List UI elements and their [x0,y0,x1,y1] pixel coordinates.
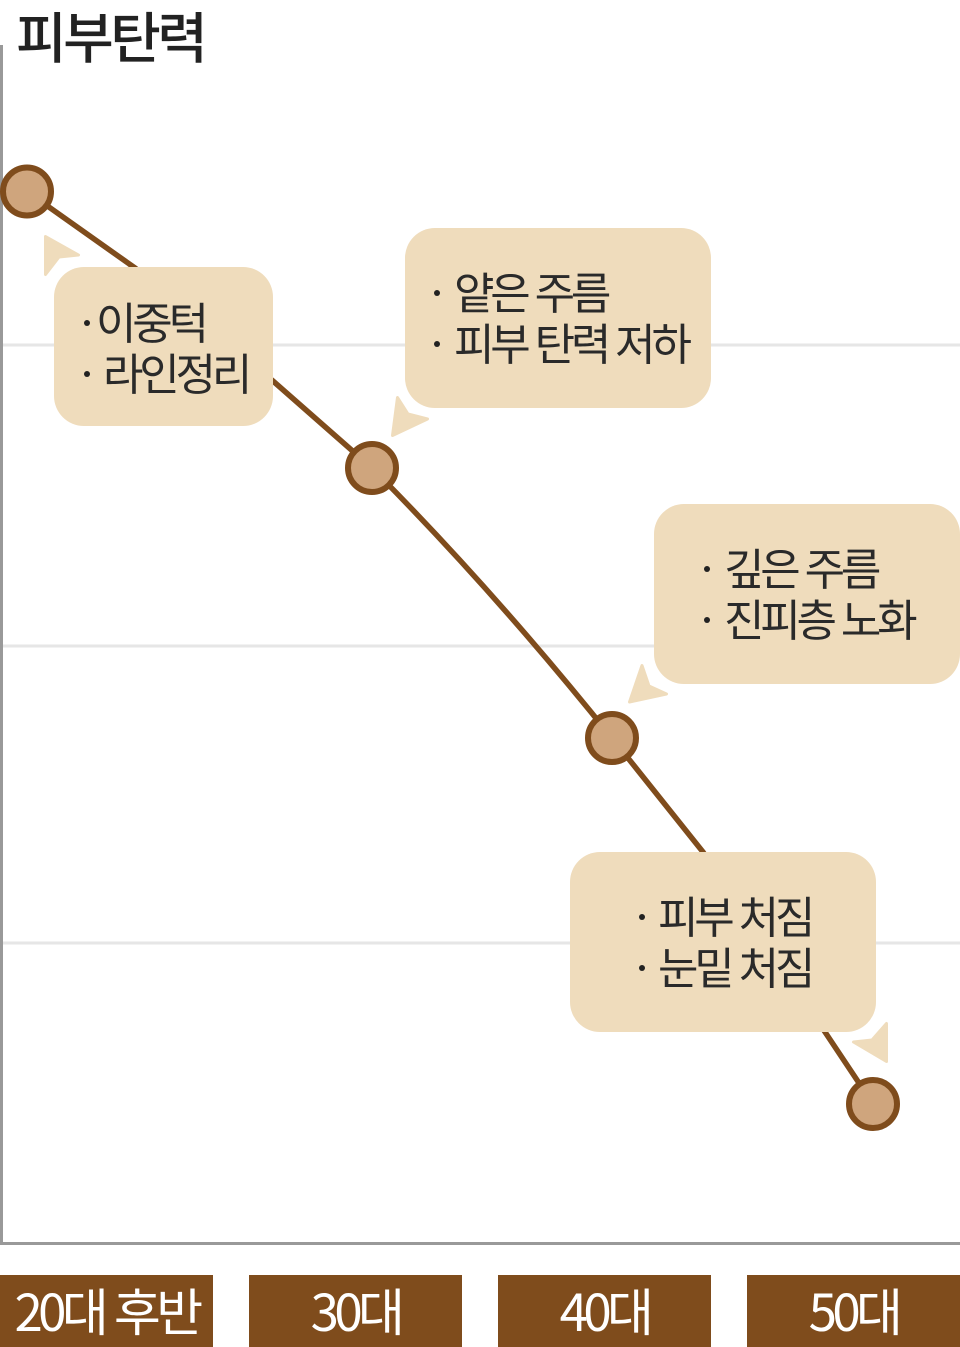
callout: 30s: 얕은 주름 [454,270,607,319]
callout: 40s [654,504,960,684]
callout: 50s [570,852,876,1032]
age label: 40s [498,1275,711,1347]
callout: 40s: 진피층 노화 [724,597,913,646]
callout: 50s: 피부 처짐 [658,894,811,943]
age label: 30s [249,1275,462,1347]
callout: 30s [405,228,711,408]
age label: 50s [747,1275,960,1347]
callout: 30s: 피부 탄력 저하 [454,321,688,370]
callout: 20s [54,267,273,426]
callout: 20s: 이중턱 [96,300,205,349]
callout: 20s: 라인정리 [103,351,248,400]
callout: 50s: 눈밑 처짐 [658,945,811,994]
callout: 40s: 깊은 주름 [724,546,877,595]
